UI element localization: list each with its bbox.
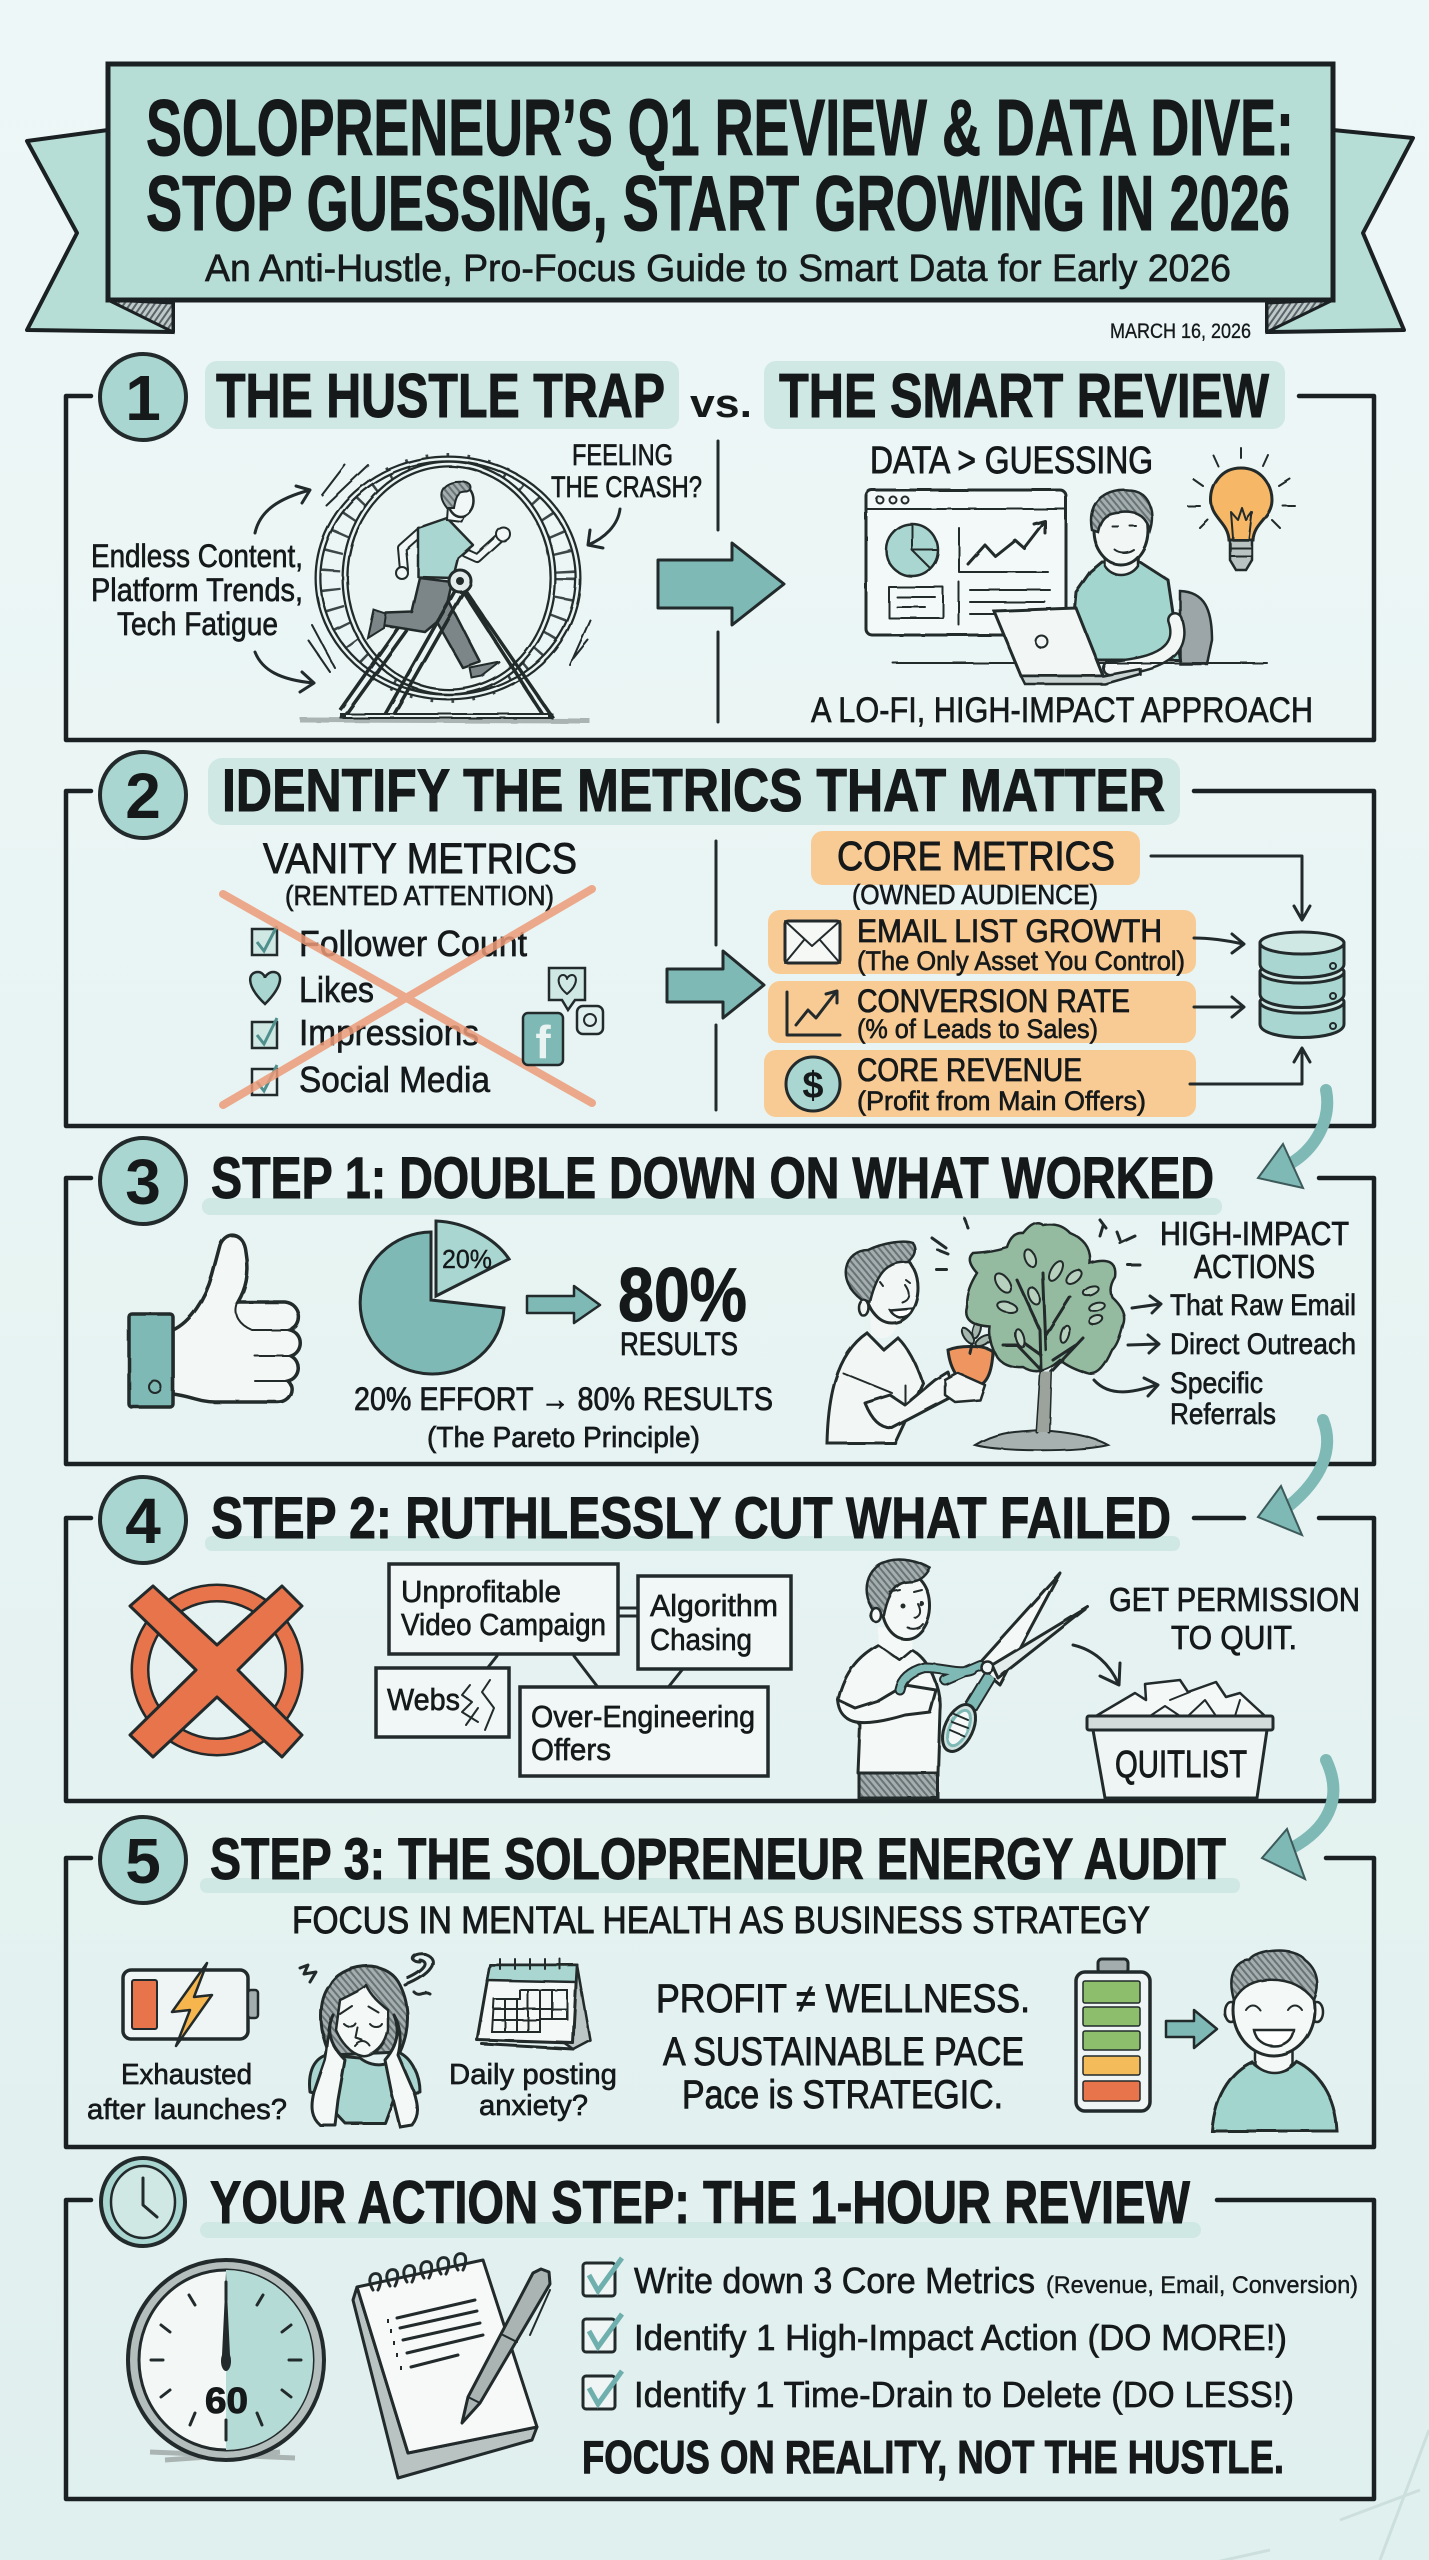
icon: clock badge [101, 2158, 185, 2246]
illustration: growing tree [966, 1220, 1140, 1450]
panel: section 1 hustle trap vs smart review [66, 354, 1374, 740]
core metrics heading: CORE METRICS [837, 833, 1115, 879]
item: time-drain: Identify 1 Time-Drain to Delete (DO LESS!) [634, 2374, 1294, 2415]
arrow: scissors to bin [1073, 1645, 1120, 1685]
illustration: happy person [1212, 1951, 1337, 2131]
icon: quitlist bin [1087, 1680, 1273, 1798]
arrow: section 4 to 5 [1262, 1760, 1333, 1879]
label: get permission to quit: GET PERMISSION [1109, 1581, 1360, 1618]
banner panel [108, 64, 1333, 300]
box: unprofitable video campaign: Unprofitable [401, 1574, 561, 1609]
label: feeling the crash [551, 439, 702, 504]
runner figure [368, 482, 510, 678]
label: exhausted after launches [87, 2059, 287, 2126]
caption: lo-fi approach: A LO-FI, HIGH-IMPACT APPROACH [811, 691, 1313, 730]
number badge 1 [100, 354, 186, 440]
label: exhausted after launches: after launches? [87, 2094, 287, 2126]
label: endless content: Platform Trends, [91, 572, 303, 608]
item: write down core metrics: Write down 3 Core Metrics [634, 2260, 1035, 2301]
label: endless content: Tech Fatigue [117, 606, 278, 642]
subheading: mental health: FOCUS IN MENTAL HEALTH AS BUSINESS STRATEGY [292, 1900, 1150, 1942]
arrow: section 2 to 3 [1258, 1090, 1327, 1188]
high-impact actions list: Referrals [1170, 1398, 1276, 1431]
heading: vs: vs. [690, 382, 752, 426]
icon: thumbs up [129, 1235, 300, 1407]
heading underline highlight [202, 1198, 1222, 1215]
box: unprofitable video campaign: Video Campaign [401, 1607, 606, 1642]
arrow: to wheel bottom [255, 652, 314, 692]
box: algorithm chasing [638, 1576, 791, 1669]
arrow: battery to happy person [1166, 2010, 1217, 2048]
label: get permission to quit [1109, 1581, 1360, 1656]
core metrics heading: (OWNED AUDIENCE) [852, 879, 1098, 910]
number badge 5: 5 [125, 1825, 161, 1897]
vanity metrics list [250, 923, 527, 1100]
box: unprofitable video campaign [389, 1564, 618, 1654]
item: impressions: Impressions [299, 1012, 479, 1053]
panel: section 4 ruthlessly cut [66, 1477, 1374, 1801]
illustration: stressed woman [300, 1954, 433, 2127]
number badge 5 [100, 1817, 186, 1903]
box: over-engineering offers: Offers [531, 1732, 611, 1767]
icon: heart bubble [549, 968, 585, 1010]
message: sustainable pace: Pace is STRATEGIC. [682, 2073, 1003, 2117]
box: over-engineering offers: Over-Engineering [531, 1699, 755, 1734]
heading: action step: YOUR ACTION STEP: THE 1-HOUR REVIEW [210, 2169, 1190, 2236]
arrow: to wheel top [255, 486, 310, 533]
heading underline highlight [205, 1536, 1180, 1551]
core item: email list growth: (The Only Asset You Control) [857, 946, 1185, 976]
heading underline highlight [200, 2222, 1201, 2238]
box: website torn [376, 1668, 509, 1737]
divider [716, 441, 720, 530]
message: sustainable pace: A SUSTAINABLE PACE [663, 2030, 1024, 2074]
panel: section 3 double down [66, 1138, 1374, 1464]
arrows: actions [1094, 1296, 1161, 1396]
ribbon left tail [27, 130, 173, 332]
illustration: notepad and pen [353, 2254, 550, 2478]
timer value: 60 [205, 2380, 248, 2421]
illustration: runner in hamster wheel [300, 459, 590, 721]
panel: section 6 action step [66, 2158, 1374, 2499]
core item: conversion rate: (% of Leads to Sales) [857, 1014, 1098, 1044]
arrow: section 3 to 4 [1258, 1420, 1327, 1535]
high-impact actions list: HIGH-IMPACT [1160, 1215, 1349, 1252]
icon: quitlist bin: QUITLIST [1115, 1744, 1247, 1786]
vanity metrics heading: (RENTED ATTENTION) [285, 880, 554, 911]
stat: 80 percent results: RESULTS [620, 1326, 738, 1362]
high-impact actions list [1160, 1215, 1356, 1431]
label: feeling the crash: FEELING [572, 439, 673, 472]
high-impact actions list: That Raw Email [1170, 1289, 1356, 1322]
heading: ruthlessly cut: STEP 2: RUTHLESSLY CUT WHAT FAILED [211, 1486, 1171, 1551]
message: sustainable pace [656, 1977, 1030, 2117]
label: exhausted after launches: Exhausted [121, 2059, 252, 2091]
label: endless content [91, 538, 303, 642]
number badge 3 [100, 1138, 186, 1224]
caption: pareto principle: 20% EFFORT → 80% RESULTS [354, 1381, 773, 1417]
label: data greater than guessing: DATA > GUESSING [870, 440, 1153, 482]
label: daily posting anxiety [449, 2059, 617, 2122]
item: write down core metrics [583, 2258, 1358, 2301]
icon: low battery with bolt [123, 1963, 258, 2046]
illustration: person holding pot [827, 1218, 994, 1443]
item: social media: Social Media [299, 1059, 491, 1100]
heading highlight [208, 758, 1180, 825]
heading: metrics: IDENTIFY THE METRICS THAT MATTER [222, 757, 1165, 824]
item: write down core metrics: (Revenue, Email, Conversion) [1046, 2272, 1358, 2299]
high-impact actions list: Direct Outreach [1170, 1328, 1356, 1361]
item: high-impact action: Identify 1 High-Impact Action (DO MORE!) [634, 2317, 1287, 2358]
heading highlight right [764, 361, 1285, 429]
illustration: 60 minute timer [128, 2260, 324, 2460]
panel: section 2 metrics that matter [66, 752, 1374, 1126]
panel: section 5 energy audit [66, 1817, 1374, 2147]
icon: facebook [523, 1013, 563, 1068]
core item: core revenue: (Profit from Main Offers) [857, 1086, 1146, 1116]
box: website torn: Webs [387, 1682, 460, 1717]
label: daily posting anxiety: Daily posting [449, 2059, 617, 2091]
stat: 80 percent results [618, 1253, 747, 1362]
number badge 1: 1 [125, 362, 161, 434]
vanity metrics heading [263, 835, 577, 911]
stat: 80 percent results: 80% [618, 1253, 747, 1338]
number badge 3: 3 [125, 1146, 161, 1218]
icon: trend chart [787, 991, 840, 1035]
label: daily posting anxiety: anxiety? [479, 2090, 588, 2122]
subtitle: An Anti-Hustle, Pro-Focus Guide to Smart Data for Early 2026 [205, 248, 1231, 290]
caption: pareto principle [354, 1381, 773, 1454]
item: follower count: Follower Count [299, 923, 527, 964]
ribbon right tail [1267, 130, 1413, 332]
icon: facebook: f [535, 1016, 551, 1068]
message: sustainable pace: PROFIT ≠ WELLNESS. [656, 1977, 1030, 2021]
arrow: effort to results [527, 1286, 600, 1323]
orange cross over vanity metrics [223, 889, 592, 1105]
vanity metrics heading: VANITY METRICS [263, 835, 577, 883]
icon: dollar coin [786, 1057, 840, 1111]
item: likes [250, 969, 374, 1010]
connectors between failed items [478, 1608, 682, 1690]
number badge 4 [100, 1477, 186, 1563]
box: algorithm chasing: Chasing [650, 1622, 752, 1657]
heading pill [811, 831, 1140, 885]
core item: conversion rate [768, 981, 1196, 1044]
divider [714, 841, 718, 945]
checklist [583, 2258, 1358, 2415]
icon: light bulb [1188, 448, 1295, 570]
label: feeling the crash: THE CRASH? [551, 471, 702, 504]
icon: calendar [477, 1959, 590, 2049]
heading: double down: STEP 1: DOUBLE DOWN ON WHAT WORKED [211, 1146, 1214, 1211]
high-impact actions list: ACTIONS [1194, 1248, 1315, 1285]
heading: the smart review: THE SMART REVIEW [779, 362, 1269, 431]
core item: core revenue: CORE REVENUE [857, 1052, 1082, 1088]
arrow: crash to wheel [588, 509, 620, 548]
illustration: person with scissors [838, 1560, 1088, 1798]
high-impact actions list: Specific [1170, 1367, 1263, 1400]
icon: envelope [785, 921, 840, 963]
arrow: vanity to core [667, 951, 764, 1018]
chart: 20 percent pie [360, 1221, 509, 1374]
icon: dollar coin: $ [802, 1065, 824, 1107]
core item: email list growth [768, 910, 1196, 976]
heading: the hustle trap: THE HUSTLE TRAP [216, 362, 665, 431]
box: algorithm chasing: Algorithm [650, 1588, 778, 1623]
number badge 2 [100, 752, 186, 838]
core item: core revenue [764, 1050, 1196, 1117]
item: likes: Likes [299, 969, 374, 1010]
core item: conversion rate: CONVERSION RATE [857, 983, 1130, 1019]
heading underline highlight [200, 1878, 1240, 1893]
icon: instagram [577, 1006, 603, 1034]
date: MARCH 16, 2026 [1110, 320, 1251, 343]
illustration: dashboard and person at laptop [866, 490, 1267, 684]
number badge 2: 2 [125, 760, 161, 832]
core metrics heading [811, 831, 1140, 910]
arrow: hustle to smart [658, 543, 784, 625]
icon: database [1260, 932, 1344, 1038]
title banner [27, 64, 1413, 332]
heading highlight left [205, 361, 679, 429]
pie label: 20% [442, 1244, 492, 1274]
label: endless content: Endless Content, [91, 538, 303, 574]
caption: pareto principle: (The Pareto Principle) [427, 1422, 700, 1454]
label: get permission to quit: TO QUIT. [1171, 1619, 1297, 1656]
core item: email list growth: EMAIL LIST GROWTH [857, 913, 1162, 949]
box: over-engineering offers [520, 1687, 768, 1776]
icon: orange cross in circle [130, 1586, 302, 1757]
number badge 4: 4 [125, 1485, 161, 1557]
arrows: metrics into database [1151, 856, 1310, 1084]
icon: full battery [1076, 1959, 1150, 2111]
